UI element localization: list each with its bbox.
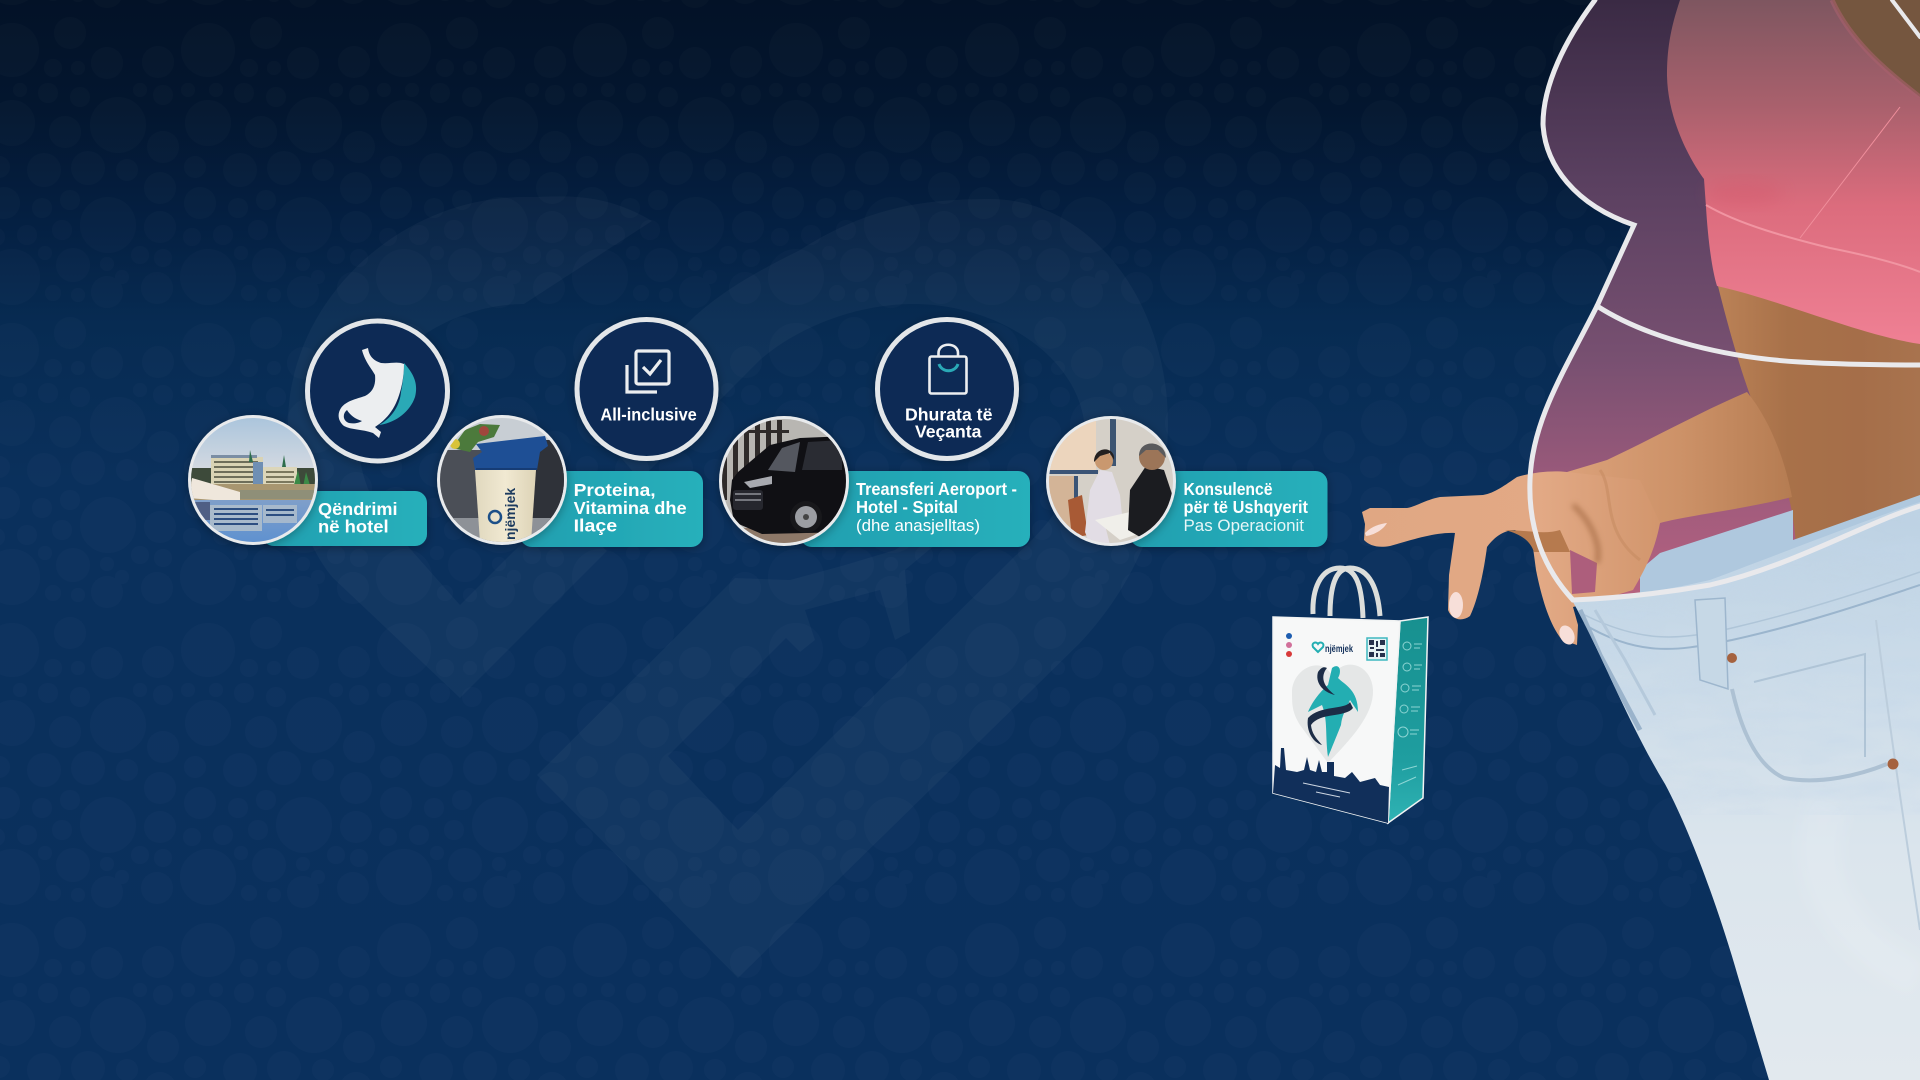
- label: all-inclusive: All-inclusive: [600, 405, 697, 425]
- label: protein: Vitamina dhe: [574, 498, 687, 518]
- card: protein and vitamins: [437, 415, 703, 547]
- feature: special gifts circle: [878, 320, 1016, 458]
- label: protein: Ilaçe: [574, 516, 617, 536]
- label: hotel: në hotel: [318, 517, 389, 537]
- gift bag: [1273, 568, 1428, 823]
- icon: stomach: [339, 348, 416, 438]
- photo: dietitian consultation: [1046, 416, 1176, 547]
- label: protein: Proteina,: [574, 480, 656, 500]
- card: hotel stay: [188, 415, 427, 546]
- skin at the neckline: [1832, 0, 1920, 97]
- label: special gifts: Dhurata të: [905, 405, 993, 425]
- bag woman figure: [1308, 666, 1358, 757]
- photo: hotel and pool: [188, 415, 320, 546]
- feature: special gifts circle: Veçanta: [915, 421, 982, 441]
- back of jeans waistband: [1640, 495, 1920, 600]
- label: consultation: për të Ushqyerit: [1184, 497, 1308, 517]
- feature: all-inclusive circle: [577, 320, 716, 458]
- fingernails: [1365, 523, 1578, 647]
- denim jeans: [1570, 495, 1920, 1080]
- photo: branded shaker: [437, 415, 567, 546]
- label: hotel: Qëndrimi: [318, 499, 398, 519]
- label: consultation: Konsulencë: [1184, 479, 1273, 499]
- label: consultation: [1184, 479, 1308, 535]
- icon: checked documents: [627, 351, 669, 392]
- icon: shopping bag: [930, 345, 966, 394]
- bag front face: [1273, 617, 1400, 823]
- pill: transfer: [800, 471, 1030, 547]
- bag logo text: njëmjek: [1325, 644, 1353, 655]
- label: transfer: (dhe anasjelltas): [856, 516, 980, 535]
- bag side panel: [1388, 617, 1428, 823]
- bag logo heart: [1313, 643, 1323, 652]
- label: hotel: [318, 499, 398, 537]
- card: airport transfer: [719, 416, 1030, 547]
- card: nutrition consultation: [1046, 416, 1328, 547]
- feature: stomach icon circle: [308, 321, 448, 461]
- bag city skyline: [1273, 748, 1389, 823]
- hand with fingers: [1362, 470, 1660, 647]
- bag handles: [1313, 568, 1380, 618]
- watermark: heart and check logo: [288, 196, 1168, 978]
- bag contact lines: [1303, 783, 1350, 797]
- pill: protein: [520, 471, 703, 547]
- torso skin: [1717, 282, 1920, 545]
- bag social icons: [1286, 633, 1292, 657]
- silhouette: purple before-shape fill: [1530, 0, 1920, 600]
- pink sports bra: [1667, 0, 1920, 344]
- bag pale heart: [1292, 665, 1373, 763]
- bag QR code: [1367, 638, 1387, 660]
- arm: [1565, 392, 1792, 570]
- label: transfer: Treansferi Aeroport -: [856, 479, 1017, 499]
- white contour line around the silhouette: [1530, 0, 1920, 600]
- bag side panel icons: [1398, 642, 1422, 785]
- label: transfer: Hotel - Spital: [856, 497, 958, 517]
- woman figure: [1362, 0, 1920, 1080]
- pill: consultation: [1130, 471, 1328, 547]
- pill: hotel: [262, 491, 427, 546]
- photo: black van: [719, 416, 850, 547]
- label: consultation: Pas Operacionit: [1184, 516, 1304, 535]
- label: transfer: [856, 479, 1017, 535]
- photo: branded shaker: njëmjek: [502, 488, 518, 540]
- label: protein: [574, 480, 687, 536]
